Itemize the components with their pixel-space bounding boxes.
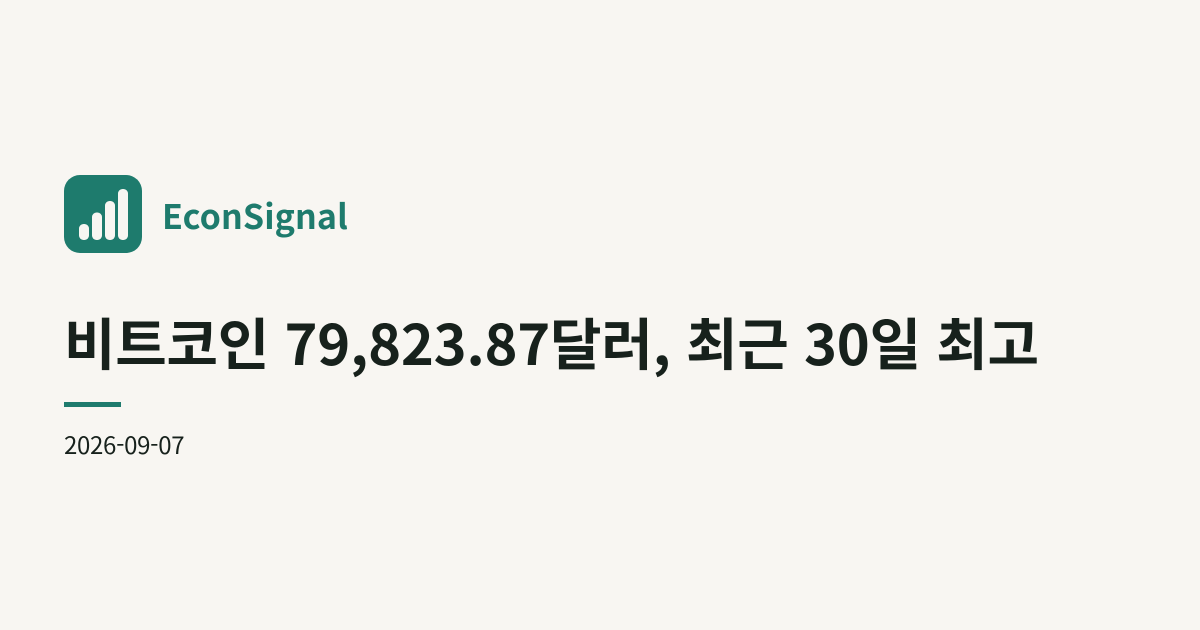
logo icon: rising signal bars — [64, 175, 142, 253]
title: 비트코인 79,823.87달러, 최근 30일 최고 — [64, 301, 1039, 382]
brand name: EconSignal — [162, 190, 348, 239]
date: 2026-09-07 — [64, 426, 184, 461]
accent rule — [64, 402, 121, 407]
